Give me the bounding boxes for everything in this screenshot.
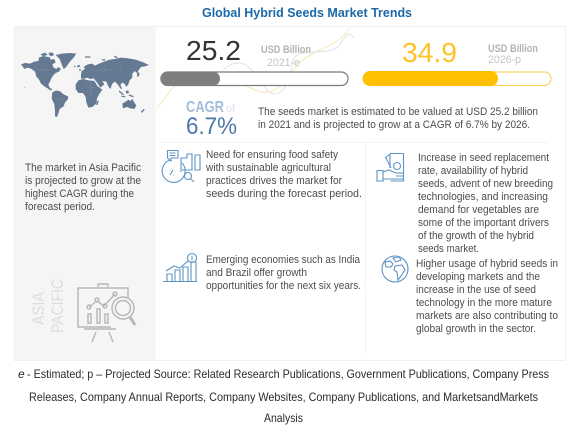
text: food safety (205, 149, 362, 200)
text: higher usage: global growth in the sector. (416, 323, 536, 335)
panel: emerging economies (163, 254, 361, 292)
text: higher usage (416, 258, 558, 335)
text: Asia Pacific growth: The market in Asia Pacific (25, 162, 141, 174)
icon: presentation board with magnifier (78, 284, 135, 342)
text: higher usage: increase in the use of seed (416, 284, 536, 296)
text: market summary (258, 106, 538, 131)
title: Global Hybrid Seeds Market Trends (202, 6, 412, 20)
panel: food safety driver (162, 149, 362, 200)
text: seed replacement: demand for vegetables are (418, 204, 539, 216)
stat: 2021 market size (160, 35, 348, 86)
icon: globe (382, 256, 408, 282)
text: food safety: practices drives the market for (206, 175, 342, 187)
stat: CAGR (186, 99, 237, 140)
text: market summary: in 2021 and is projected to grow at a CAGR of 6.7% by 2026. (258, 119, 530, 131)
text: higher usage: technology in the more mature (416, 297, 552, 309)
decorative wave lines (157, 28, 354, 108)
text: Asia Pacific growth: forecast period. (25, 201, 95, 213)
panel: Asia Pacific (15, 27, 156, 360)
text: Asia Pacific growth: highest CAGR during the (25, 188, 134, 200)
stat: CAGR: 6.7% (186, 113, 237, 140)
text: seed replacement: seeds market. (418, 243, 479, 255)
label: Asia Pacific vertical: PACIFIC (48, 279, 67, 333)
dividers (160, 142, 548, 355)
text: seed replacement: rate, availability of hybrid (418, 165, 528, 177)
icon: hand with banknotes (377, 154, 404, 181)
text: seed replacement: Increase in seed replacement (418, 152, 549, 164)
stat: 2026 market size: 34.9 (402, 37, 457, 68)
bar: 2021 progress (160, 71, 348, 86)
footnote: sources (18, 367, 549, 425)
text: higher usage: Higher usage of hybrid seeds in (416, 258, 558, 270)
label: Asia Pacific vertical: ASIA (29, 291, 48, 325)
bar: 2026 progress (363, 71, 551, 86)
label: Asia Pacific vertical (29, 279, 67, 333)
panel: seed replacement driver (377, 152, 553, 255)
footnote: sources: Analysis (264, 411, 303, 425)
text: Asia Pacific growth: is projected to grow at the (25, 175, 141, 187)
text: emerging economies: and Brazil offer growth (206, 267, 307, 279)
stat: CAGR: of (226, 103, 236, 115)
text: emerging economies (206, 254, 361, 292)
text: emerging economies: opportunities for the next six years. (206, 280, 361, 292)
stat: CAGR: CAGR (186, 99, 224, 116)
text: seed replacement: of the growth of the hybrid (418, 230, 534, 242)
stat: 2026 market size: 2026-p (488, 54, 521, 66)
text: higher usage: developing markets and the (416, 271, 540, 283)
stat: 2021 market size: 25.2 (186, 35, 241, 66)
text: seed replacement: some of the important drivers (418, 217, 549, 229)
text: seed replacement: seeds, advent of new breeding (418, 178, 553, 190)
stat: 2021 market size: 2021-e (267, 57, 300, 69)
text: emerging economies: Emerging economies such as India (206, 254, 361, 266)
text: food safety: seeds during the forecast period. (206, 188, 362, 200)
footnote: sources: e (18, 367, 25, 381)
text: seed replacement: technologies, and increasing (418, 191, 548, 203)
text: Asia Pacific growth (25, 162, 141, 213)
text: food safety: Need for ensuring food safety (206, 149, 338, 161)
text: seed replacement (418, 152, 553, 255)
stat: 2026 market size: USD Billion (488, 43, 538, 55)
text: market summary: The seeds market is estimated to be valued at USD 25.2 billion (258, 106, 538, 118)
panel: higher usage driver (382, 256, 558, 335)
text: higher usage: markets are also contributing to (416, 310, 558, 322)
icon: report with chart (162, 150, 200, 182)
text: food safety: with sustainable agricultural (205, 162, 331, 174)
stat: 2021 market size: USD Billion (261, 44, 311, 56)
stat: 2026 market size (363, 37, 551, 86)
icon: growth chart with coin (163, 254, 197, 282)
icon: world map (21, 52, 149, 117)
